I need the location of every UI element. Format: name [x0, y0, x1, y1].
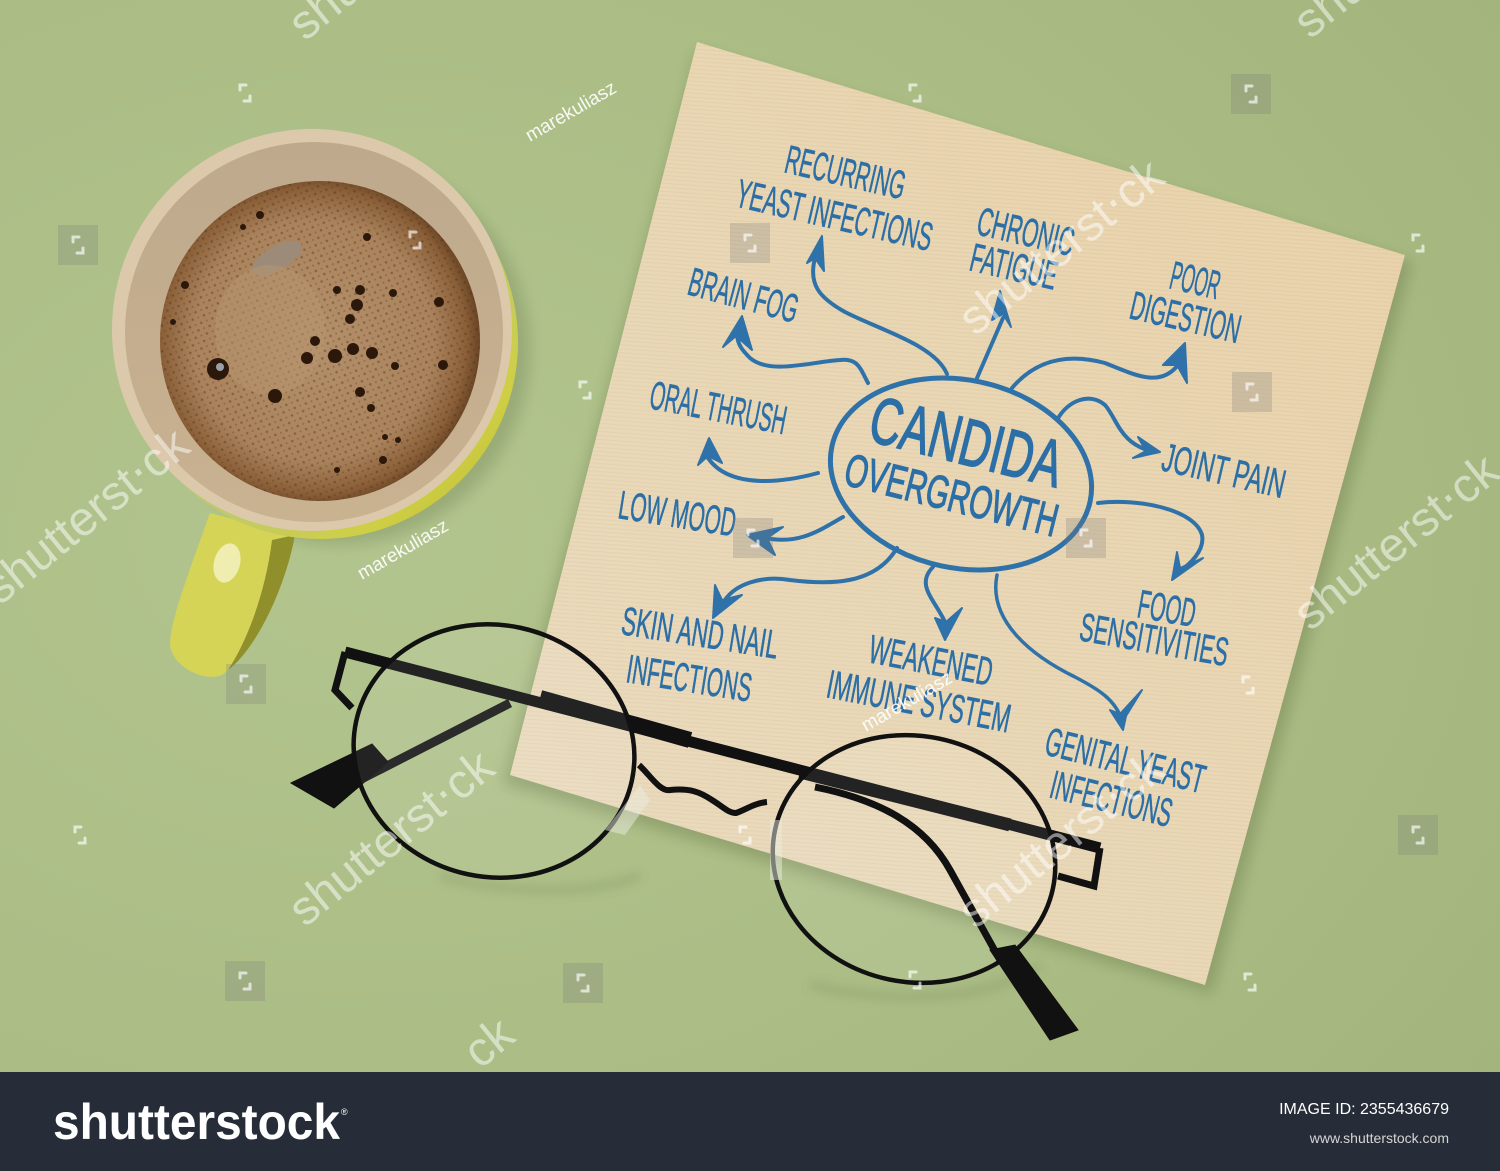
napkin	[503, 42, 1412, 994]
bridge	[639, 765, 767, 813]
arrow to low mood	[747, 517, 843, 555]
arrow to recurring yeast infections	[807, 236, 947, 374]
label: low mood: LOW MOOD	[616, 483, 739, 545]
website: www.shutterstock.com	[1309, 1130, 1449, 1146]
glasses front bar	[335, 652, 1100, 886]
heading: Candida: CANDIDA	[863, 382, 1071, 501]
label: genital yeast infections	[1041, 720, 1210, 836]
label: genital yeast infections: INFECTIONS	[1046, 763, 1177, 836]
watermarks: marekuliasz	[858, 667, 956, 736]
label: recurring yeast infections	[732, 138, 937, 260]
arrow to food sensitivities	[1098, 502, 1203, 580]
arrow to brain fog	[723, 316, 868, 383]
label: genital yeast infections: GENITAL YEAST	[1041, 720, 1210, 802]
watermarks: marekuliasz	[522, 77, 620, 146]
heading: Overgrowth: OVERGROWTH	[840, 443, 1064, 546]
coffee cup	[112, 129, 530, 677]
arrow to weakened immune system	[926, 567, 962, 640]
watermarks: shutterst⋅ck	[279, 739, 505, 937]
arrow to joint pain	[1057, 399, 1160, 458]
label: skin and nail infections	[619, 599, 782, 711]
label: weakened immune system: WEAKENED	[865, 628, 996, 695]
mug body	[122, 145, 518, 539]
icon: mug handle	[170, 513, 295, 677]
arrow to oral thrush	[698, 438, 818, 481]
label: recurring yeast infections: YEAST INFECTIONS	[732, 172, 937, 260]
image id: IMAGE ID: 2355436679	[1279, 1101, 1449, 1118]
label: brain fog: BRAIN FOG	[684, 260, 803, 332]
label: skin and nail infections: INFECTIONS	[624, 647, 755, 711]
eyeglasses	[291, 598, 1100, 1040]
arrow to poor digestion	[1012, 343, 1187, 388]
right temple arm	[815, 787, 1000, 960]
footer bar	[0, 1072, 1500, 1171]
label: poor digestion: DIGESTION	[1126, 284, 1245, 352]
label: food sensitivities: SENSITIVITIES	[1076, 606, 1232, 675]
label: chronic fatigue: CHRONIC	[973, 200, 1078, 265]
watermarks: ck	[454, 1007, 525, 1079]
label: oral thrush: ORAL THRUSH	[646, 374, 790, 443]
shutterstock logo: shutterstock	[53, 1094, 340, 1150]
mind map: central bubble	[812, 355, 1110, 593]
label: skin and nail infections: SKIN AND NAIL	[619, 599, 782, 668]
left lens	[330, 598, 658, 904]
label: food sensitivities: FOOD	[1134, 583, 1199, 636]
glasses left temple arm	[291, 703, 510, 808]
arrow to genital yeast infections	[996, 575, 1142, 730]
label: chronic fatigue: FATIGUE	[966, 236, 1062, 299]
label: poor digestion	[1126, 254, 1245, 352]
watermark logo squares	[58, 74, 1438, 1003]
registered mark: ®	[341, 1107, 348, 1117]
label: recurring yeast infections: RECURRING	[781, 138, 910, 208]
label: weakened immune system	[823, 628, 1014, 741]
right lens	[750, 709, 1078, 1009]
nose pads	[605, 785, 782, 880]
arrow to skin and nail infections	[713, 548, 897, 618]
watermarks: marekuliasz	[354, 515, 452, 584]
watermarks: shutterst⋅ck	[949, 148, 1175, 346]
label: chronic fatigue	[966, 200, 1078, 299]
watermarks: shutterst⋅ck	[949, 741, 1175, 939]
arrow to chronic fatigue	[977, 291, 1011, 378]
label: food sensitivities	[1076, 583, 1232, 675]
label: poor digestion: POOR	[1166, 254, 1225, 308]
label: weakened immune system: IMMUNE SYSTEM	[823, 663, 1014, 741]
label: joint pain: JOINT PAIN	[1158, 436, 1290, 507]
mug rim	[112, 129, 512, 531]
icon: coffee surface	[160, 180, 480, 502]
